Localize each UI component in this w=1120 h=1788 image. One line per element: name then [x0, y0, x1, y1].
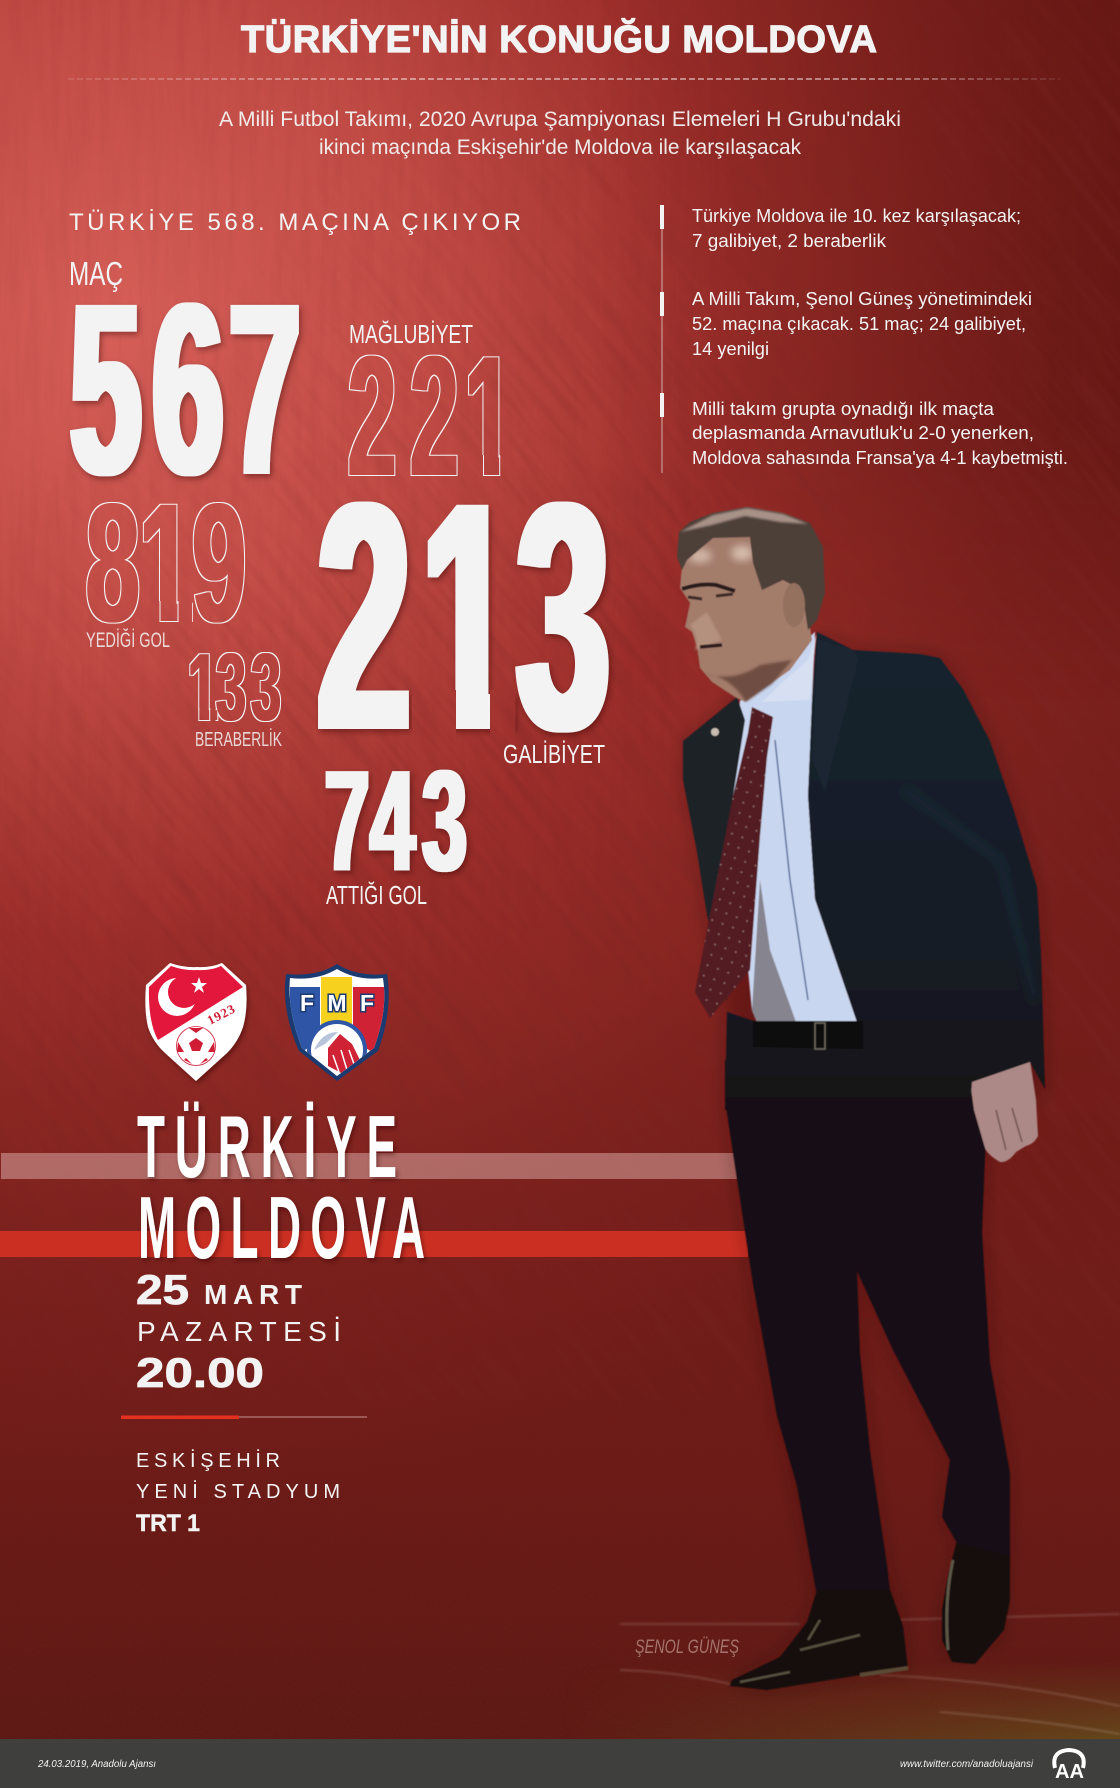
title: TÜRKİYE'NİN KONUĞU MOLDOVA	[241, 17, 877, 61]
match date and time: PAZARTESİ	[137, 1316, 341, 1347]
venue and channel: YENİ STADYUM	[136, 1480, 340, 1503]
facts list: A Milli Takım, Şenol Güneş yönetimindeki	[692, 289, 1032, 309]
intro text: A Milli Futbol Takımı, 2020 Avrupa Şampiyonası Elemeleri H Grubu'ndaki	[219, 108, 901, 131]
pitch lines	[620, 1614, 1120, 1734]
stat: 743 goals scored: 743	[325, 741, 467, 901]
belt	[753, 1021, 863, 1049]
stat: 221 losses: 221	[348, 320, 513, 512]
stat: 133 draws: 133	[188, 633, 281, 741]
icon: Anadolu Agency logo: AA	[1055, 1761, 1084, 1783]
crest: Turkey: 1923	[205, 1001, 238, 1028]
facts list: deplasmanda Arnavutluk'u 2-0 yenerken,	[692, 423, 1034, 443]
stat: 221 losses: MAĞLUBİYET	[349, 319, 473, 349]
back shoe	[942, 1540, 1010, 1664]
band: light	[1, 1153, 737, 1179]
venue and channel	[136, 1449, 340, 1537]
facts list: 14 yenilgi	[692, 339, 769, 359]
venue and channel: ESKİŞEHİR	[136, 1449, 280, 1472]
brows, eyes, mouth	[682, 584, 735, 591]
dashed divider	[68, 78, 1060, 80]
crest: Moldova: F	[360, 990, 374, 1016]
stat: 133 draws: BERABERLİK	[195, 728, 282, 751]
trousers	[725, 1060, 1010, 1596]
venue and channel: TRT 1	[136, 1510, 200, 1537]
intro text: ikinci maçında Eskişehir'de Moldova ile karşılaşacak	[319, 136, 801, 159]
facts list: Moldova sahasında Fransa'ya 4-1 kaybetmişti.	[692, 448, 1068, 468]
front shoe	[730, 1590, 908, 1690]
intro text	[219, 108, 901, 159]
stat: 213 wins: 213	[317, 436, 610, 797]
match date and time: 25	[136, 1266, 189, 1313]
collar	[762, 635, 816, 702]
crest: Moldova: F	[300, 990, 314, 1016]
coach figure	[677, 507, 1045, 1690]
band: red	[0, 1231, 748, 1257]
crest: Turkey	[145, 963, 247, 1081]
crest: Moldova: M	[327, 990, 347, 1016]
credit: 24.03.2019, Anadolu Ajansı	[37, 1759, 156, 1770]
facts list	[660, 205, 1068, 473]
jacket	[725, 632, 1045, 1110]
facts list: Milli takım grupta oynadığı ilk maçta	[692, 399, 995, 419]
team names	[137, 1098, 425, 1277]
crest: Moldova	[285, 964, 389, 1081]
facts list: 7 galibiyet, 2 beraberlik	[692, 231, 887, 251]
stat: 567 matches: MAÇ	[69, 255, 123, 292]
neck and face	[680, 535, 812, 702]
facts list: Türkiye Moldova ile 10. kez karşılaşacak;	[692, 206, 1021, 226]
footer	[0, 1739, 1120, 1788]
hair	[677, 507, 825, 630]
stat: 743 goals scored: ATTIĞI GOL	[326, 880, 427, 910]
footer link: www.twitter.com/anadoluajansi	[900, 1759, 1034, 1770]
match date and time: MART	[204, 1279, 302, 1310]
coach name: ŞENOL GÜNEŞ	[635, 1637, 739, 1658]
team names: TÜRKİYE	[137, 1098, 397, 1196]
divider	[121, 1416, 367, 1419]
match date and time	[136, 1266, 341, 1396]
stat: 213 wins: GALİBİYET	[503, 739, 605, 769]
stat: 819 goals conceded: YEDİĞİ GOL	[86, 629, 170, 652]
shirt	[732, 632, 857, 1022]
match date and time: 20.00	[136, 1349, 264, 1396]
stat: 819 goals conceded: 819	[86, 469, 246, 658]
stat: 567 matches: 567	[70, 254, 301, 525]
hand	[970, 1061, 1038, 1162]
icon: Anadolu Agency logo	[1054, 1750, 1084, 1783]
facts list: 52. maçına çıkacak. 51 maç; 24 galibiyet,	[692, 314, 1026, 334]
ear	[783, 583, 805, 627]
team names: MOLDOVA	[138, 1179, 425, 1277]
tie	[695, 707, 773, 1018]
subheading: TÜRKİYE 568. MAÇINA ÇIKIYOR	[69, 209, 521, 236]
